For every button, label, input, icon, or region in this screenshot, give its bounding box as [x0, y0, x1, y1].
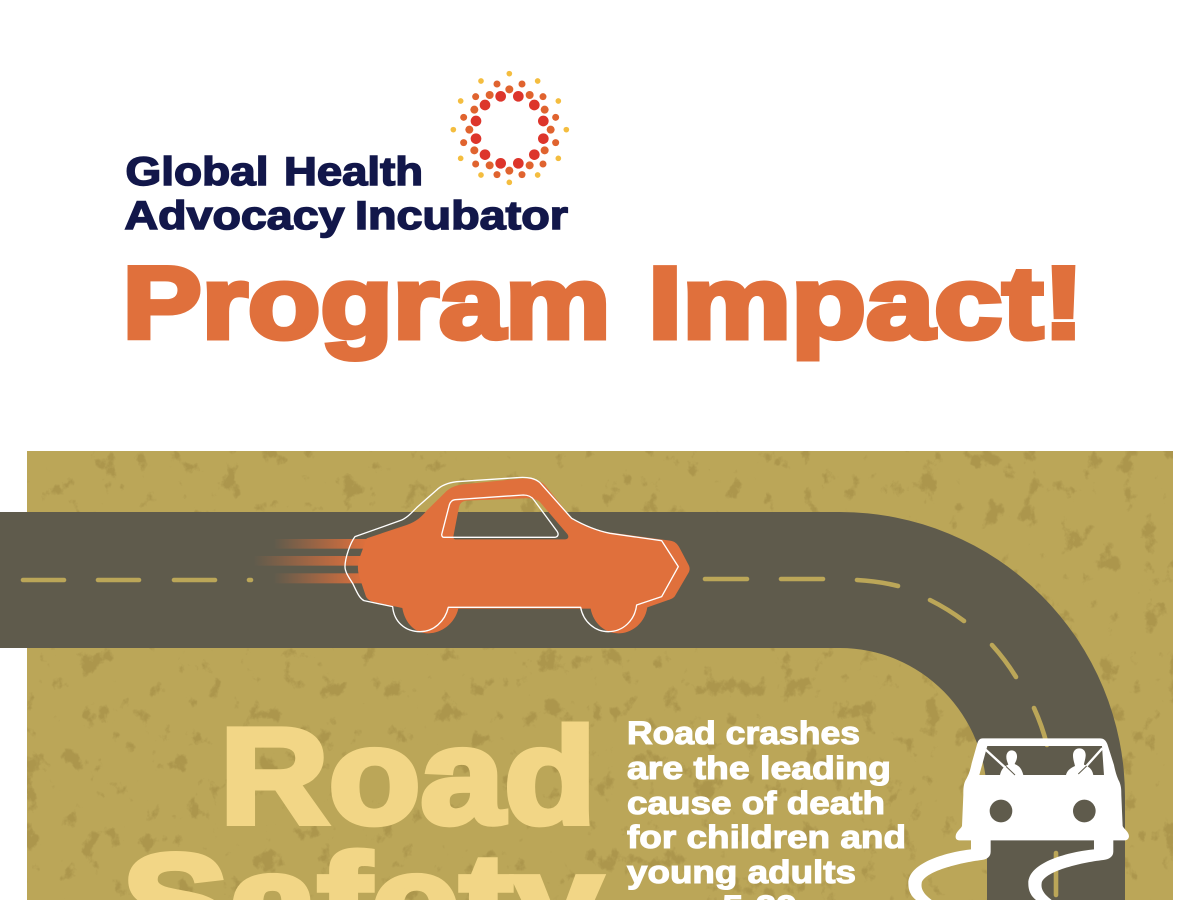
panel: road safety background	[27, 451, 1173, 900]
car white outline	[345, 477, 678, 632]
heading: Road Safety: Road	[220, 700, 596, 852]
title	[122, 246, 1084, 360]
logo wordmark: Incubator	[355, 194, 568, 238]
title: Program	[122, 246, 610, 360]
logo wordmark	[124, 150, 568, 238]
logo wordmark: Health	[284, 150, 423, 194]
heading: Road Safety	[122, 700, 602, 900]
text block: road crashes statistic: are the leading	[627, 750, 891, 786]
skid marks	[908, 838, 1113, 900]
road	[0, 512, 1125, 900]
icon: orange speeding car with motion lines	[253, 477, 690, 633]
passengers and seatbelts	[1000, 748, 1093, 775]
title: Impact!	[648, 246, 1084, 360]
logo: Global Health Advocacy Incubator	[124, 71, 569, 238]
road centre dashes	[23, 579, 1056, 895]
logo mark: radial dot ring	[450, 71, 569, 185]
car body	[956, 738, 1129, 840]
car body	[358, 479, 690, 633]
text block: road crashes statistic: for children and	[627, 819, 906, 855]
logo wordmark: Global	[126, 150, 268, 194]
logo wordmark: Advocacy	[124, 194, 345, 238]
text block: road crashes statistic: Road crashes	[627, 715, 860, 751]
text block: road crashes statistic: cause of death	[627, 785, 885, 821]
icon: white skidding car, front view	[908, 738, 1129, 900]
headlights	[990, 800, 1012, 822]
motion lines	[253, 539, 367, 583]
text block: road crashes statistic	[627, 715, 906, 900]
text block: road crashes statistic: young adults	[627, 854, 856, 890]
